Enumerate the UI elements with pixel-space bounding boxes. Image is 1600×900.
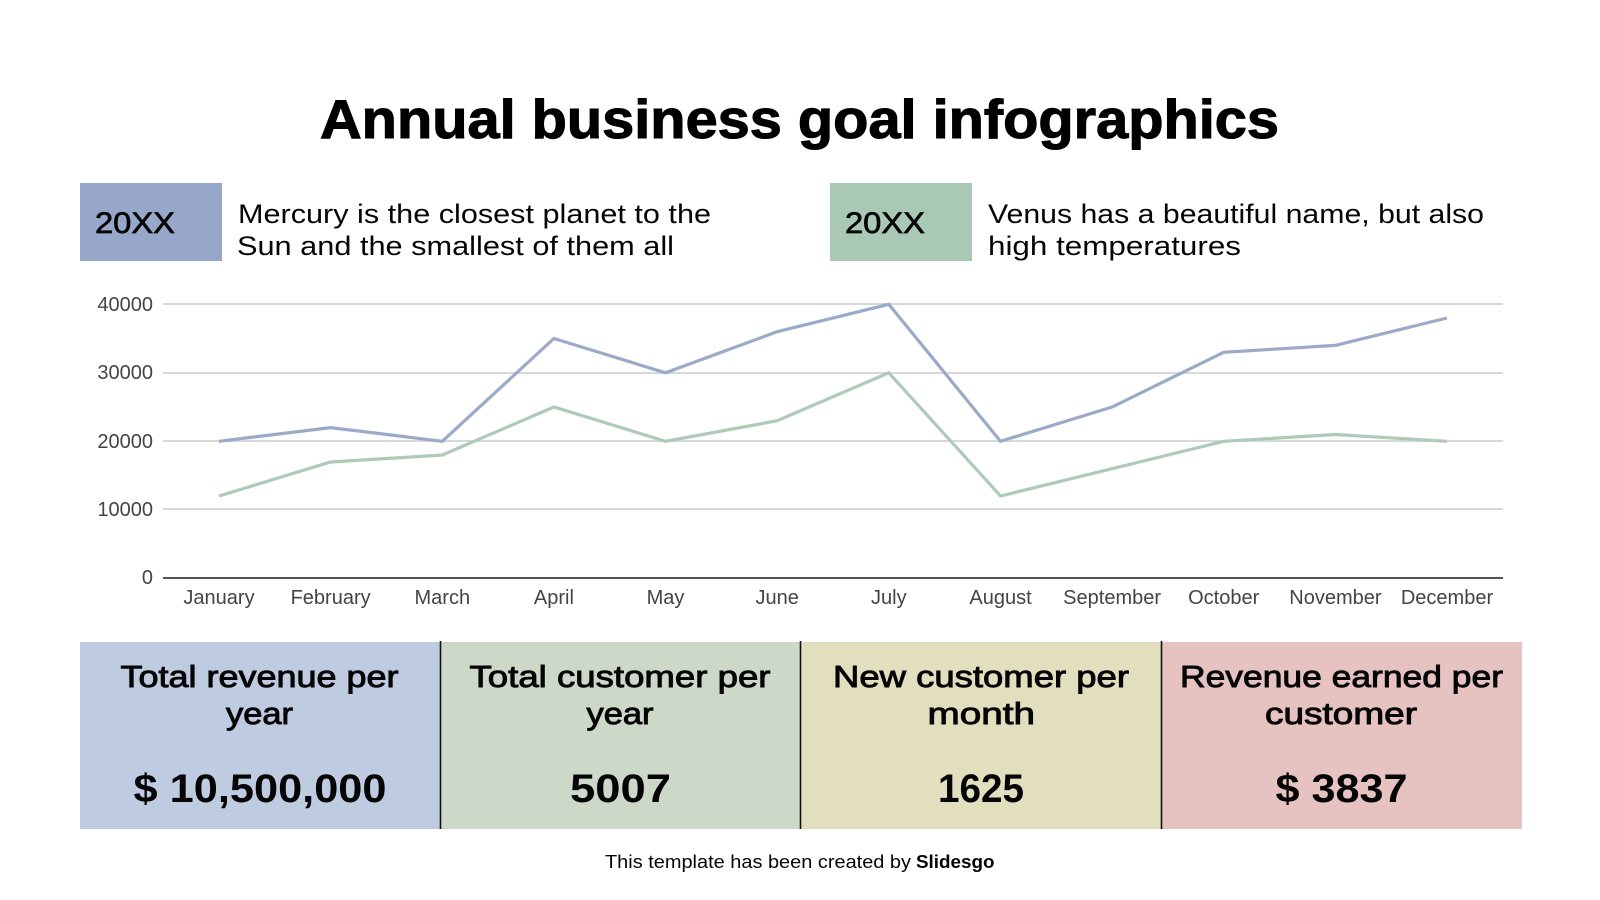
panel: total customer per year: year <box>586 696 654 731</box>
panel: total revenue per year <box>80 642 440 829</box>
x axis labels: April <box>534 587 574 609</box>
panel: total revenue per year: Total revenue per <box>120 659 398 694</box>
legend swatch: green year <box>830 183 972 261</box>
legend swatch: blue year: 20XX <box>95 207 175 240</box>
series line: Mercury (blue) <box>219 304 1447 441</box>
panel: total revenue per year: year <box>226 696 293 731</box>
x axis labels: February <box>291 587 371 609</box>
y axis labels: 10000 <box>97 499 153 521</box>
legend description: Venus: high temperatures <box>988 231 1241 261</box>
footer credit: This template has been created by <box>605 851 912 872</box>
x axis labels: November <box>1289 587 1382 609</box>
panel: new customer per month: 1625 <box>938 767 1024 811</box>
panel: total revenue per year: $ 10,500,000 <box>134 767 386 811</box>
legend description: Mercury <box>237 199 711 261</box>
x axis labels: December <box>1401 587 1493 609</box>
panel: revenue earned per customer: Revenue earned per <box>1180 659 1503 694</box>
legend swatch: blue year <box>80 183 222 261</box>
x axis labels: March <box>415 587 470 609</box>
line chart <box>97 294 1503 609</box>
x axis labels: January <box>183 587 255 609</box>
x axis labels: May <box>647 587 684 609</box>
panel: total customer per year <box>440 642 800 829</box>
title: Annual business goal infographics <box>320 88 1279 150</box>
y axis labels: 30000 <box>97 362 153 384</box>
x axis labels: July <box>871 587 907 609</box>
legend description: Mercury: Sun and the smallest of them all <box>237 231 674 261</box>
x axis labels: June <box>756 587 799 609</box>
x axis labels: August <box>969 587 1032 609</box>
panel: total customer per year: 5007 <box>570 767 671 811</box>
legend: Venus series <box>830 183 1484 261</box>
x axis labels: September <box>1063 587 1161 609</box>
y axis labels: 40000 <box>97 294 153 316</box>
y axis labels: 0 <box>142 567 153 589</box>
panel: revenue earned per customer: customer <box>1265 696 1417 731</box>
panel: new customer per month: New customer per <box>833 659 1129 694</box>
x axis labels <box>183 587 1493 609</box>
legend description: Venus <box>988 199 1484 261</box>
legend swatch: green year: 20XX <box>845 207 925 240</box>
stats table <box>80 641 1522 829</box>
footer credit: Slidesgo <box>916 851 994 872</box>
y axis labels <box>97 294 153 589</box>
legend description: Mercury: Mercury is the closest planet to the <box>238 199 711 229</box>
panel: revenue earned per customer <box>1162 642 1522 829</box>
legend: Mercury series <box>80 183 711 261</box>
legend description: Venus: Venus has a beautiful name, but also <box>988 199 1484 229</box>
panel: new customer per month: month <box>928 696 1035 731</box>
series line: Venus (green) <box>219 373 1447 496</box>
x axis labels: October <box>1188 587 1260 609</box>
panel: total customer per year: Total customer per <box>470 659 770 694</box>
panel: new customer per month <box>800 642 1162 829</box>
panel: revenue earned per customer: $ 3837 <box>1276 767 1408 811</box>
y axis labels: 20000 <box>97 431 153 453</box>
